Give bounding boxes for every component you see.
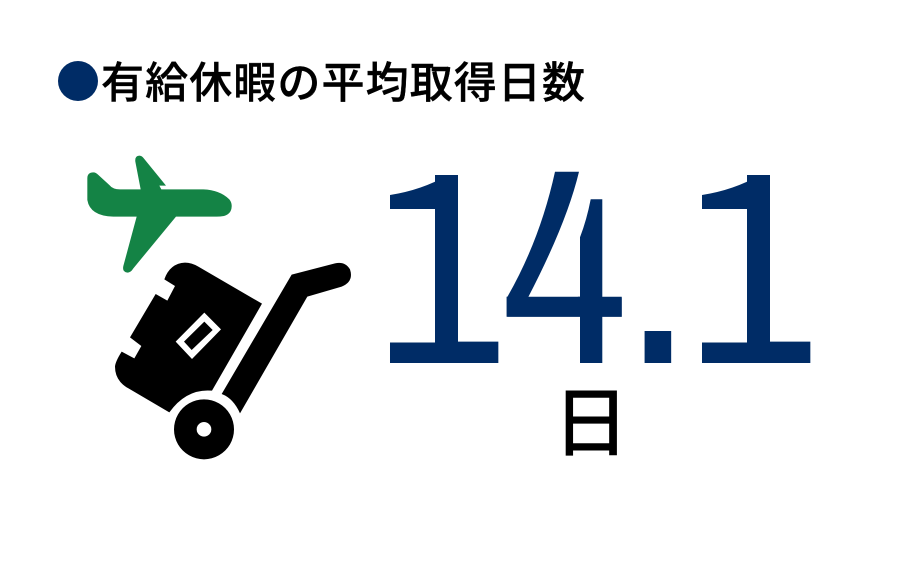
digit 1 flag correction bbox=[697, 165, 777, 342]
suitcase bbox=[115, 263, 262, 412]
icon: luggage on hand cart bbox=[115, 263, 351, 459]
cart wheel bbox=[174, 399, 234, 459]
title bbox=[58, 60, 585, 108]
digit 1 flag correction bbox=[385, 165, 465, 342]
cart handle bbox=[222, 263, 351, 413]
digit 1: 1 bbox=[670, 124, 834, 424]
luggage tag bbox=[176, 313, 221, 359]
digit 4: 4 bbox=[496, 125, 634, 425]
unit label: 日 bbox=[553, 382, 629, 467]
digit 1: 1 bbox=[358, 124, 522, 424]
title text: 有給休暇の平均取得日数 bbox=[101, 60, 585, 108]
decimal point: . bbox=[617, 124, 699, 424]
digit 4 open diagonal correction bbox=[500, 165, 628, 365]
title bullet bbox=[58, 61, 98, 101]
icon: airplane bbox=[87, 156, 232, 273]
big number bbox=[358, 124, 834, 425]
